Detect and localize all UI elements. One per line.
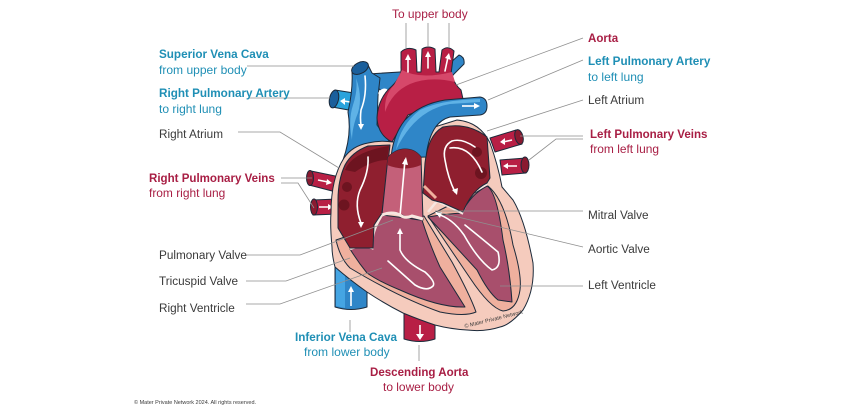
label: right pulmonary artery xyxy=(159,87,290,116)
label: left ventricle: Left Ventricle xyxy=(588,279,656,292)
vessel: aorta xyxy=(377,47,463,142)
label: right ventricle: Right Ventricle xyxy=(159,302,235,315)
chamber: right ventricle xyxy=(350,215,465,307)
leader lines xyxy=(238,23,583,361)
chamber: left ventricle xyxy=(428,184,512,302)
label: right pulmonary veins xyxy=(149,173,275,200)
label: left pulmonary veins: Left Pulmonary Veins xyxy=(590,129,707,141)
label: mitral valve: Mitral Valve xyxy=(588,209,649,222)
label: left pulmonary veins xyxy=(590,129,707,156)
label: pulmonary valve: Pulmonary Valve xyxy=(159,249,247,262)
vessel: right pulmonary artery xyxy=(328,89,354,111)
label: aorta: Aorta xyxy=(588,33,619,45)
label: left atrium: Left Atrium xyxy=(588,94,644,107)
label: to upper body: To upper body xyxy=(392,7,468,21)
label: inferior vena cava xyxy=(295,331,397,359)
heart body xyxy=(331,120,533,331)
vessel: left pulmonary branch behind aorta xyxy=(368,55,464,90)
vessel: pulmonary artery xyxy=(391,97,487,158)
label: superior vena cava: Superior Vena Cava xyxy=(159,48,269,61)
wall: right ventricle band xyxy=(336,216,476,314)
wall: left ventricle band xyxy=(428,186,520,311)
label: right pulmonary artery: Right Pulmonary Artery xyxy=(159,87,290,100)
label: descending aorta: to lower body xyxy=(383,380,454,394)
label: right pulmonary veins: Right Pulmonary Veins xyxy=(149,173,275,185)
vessel: left pulmonary veins xyxy=(490,129,529,175)
vessel: descending aorta xyxy=(404,305,435,342)
chamber: right atrium xyxy=(338,145,390,248)
chamber: left atrium xyxy=(423,126,490,212)
pulmonary trunk interior xyxy=(382,149,423,220)
label: inferior vena cava: from lower body xyxy=(304,345,390,359)
label: left pulmonary veins: from left lung xyxy=(590,142,659,156)
label: superior vena cava: from upper body xyxy=(159,63,247,77)
label: inferior vena cava: Inferior Vena Cava xyxy=(295,331,397,344)
label: right atrium: Right Atrium xyxy=(159,128,223,141)
label: left pulmonary artery: to left lung xyxy=(588,70,644,84)
label: superior vena cava xyxy=(159,48,269,77)
watermark: © Mater Private Network xyxy=(464,309,524,330)
vessel: right pulmonary veins xyxy=(306,170,340,215)
label: descending aorta xyxy=(370,367,469,394)
label: tricuspid valve: Tricuspid Valve xyxy=(159,275,238,288)
copyright: © Mater Private Network 2024. All rights reserved. xyxy=(134,399,257,406)
vessel: inferior vena cava xyxy=(335,262,367,310)
label: aortic valve: Aortic Valve xyxy=(588,243,650,256)
label: left pulmonary artery: Left Pulmonary Artery xyxy=(588,55,711,68)
label: right pulmonary veins: from right lung xyxy=(149,186,225,200)
label: right pulmonary artery: to right lung xyxy=(159,102,222,116)
label: descending aorta: Descending Aorta xyxy=(370,367,469,379)
label: left pulmonary artery xyxy=(588,55,711,84)
vessel: superior vena cava xyxy=(343,59,392,160)
